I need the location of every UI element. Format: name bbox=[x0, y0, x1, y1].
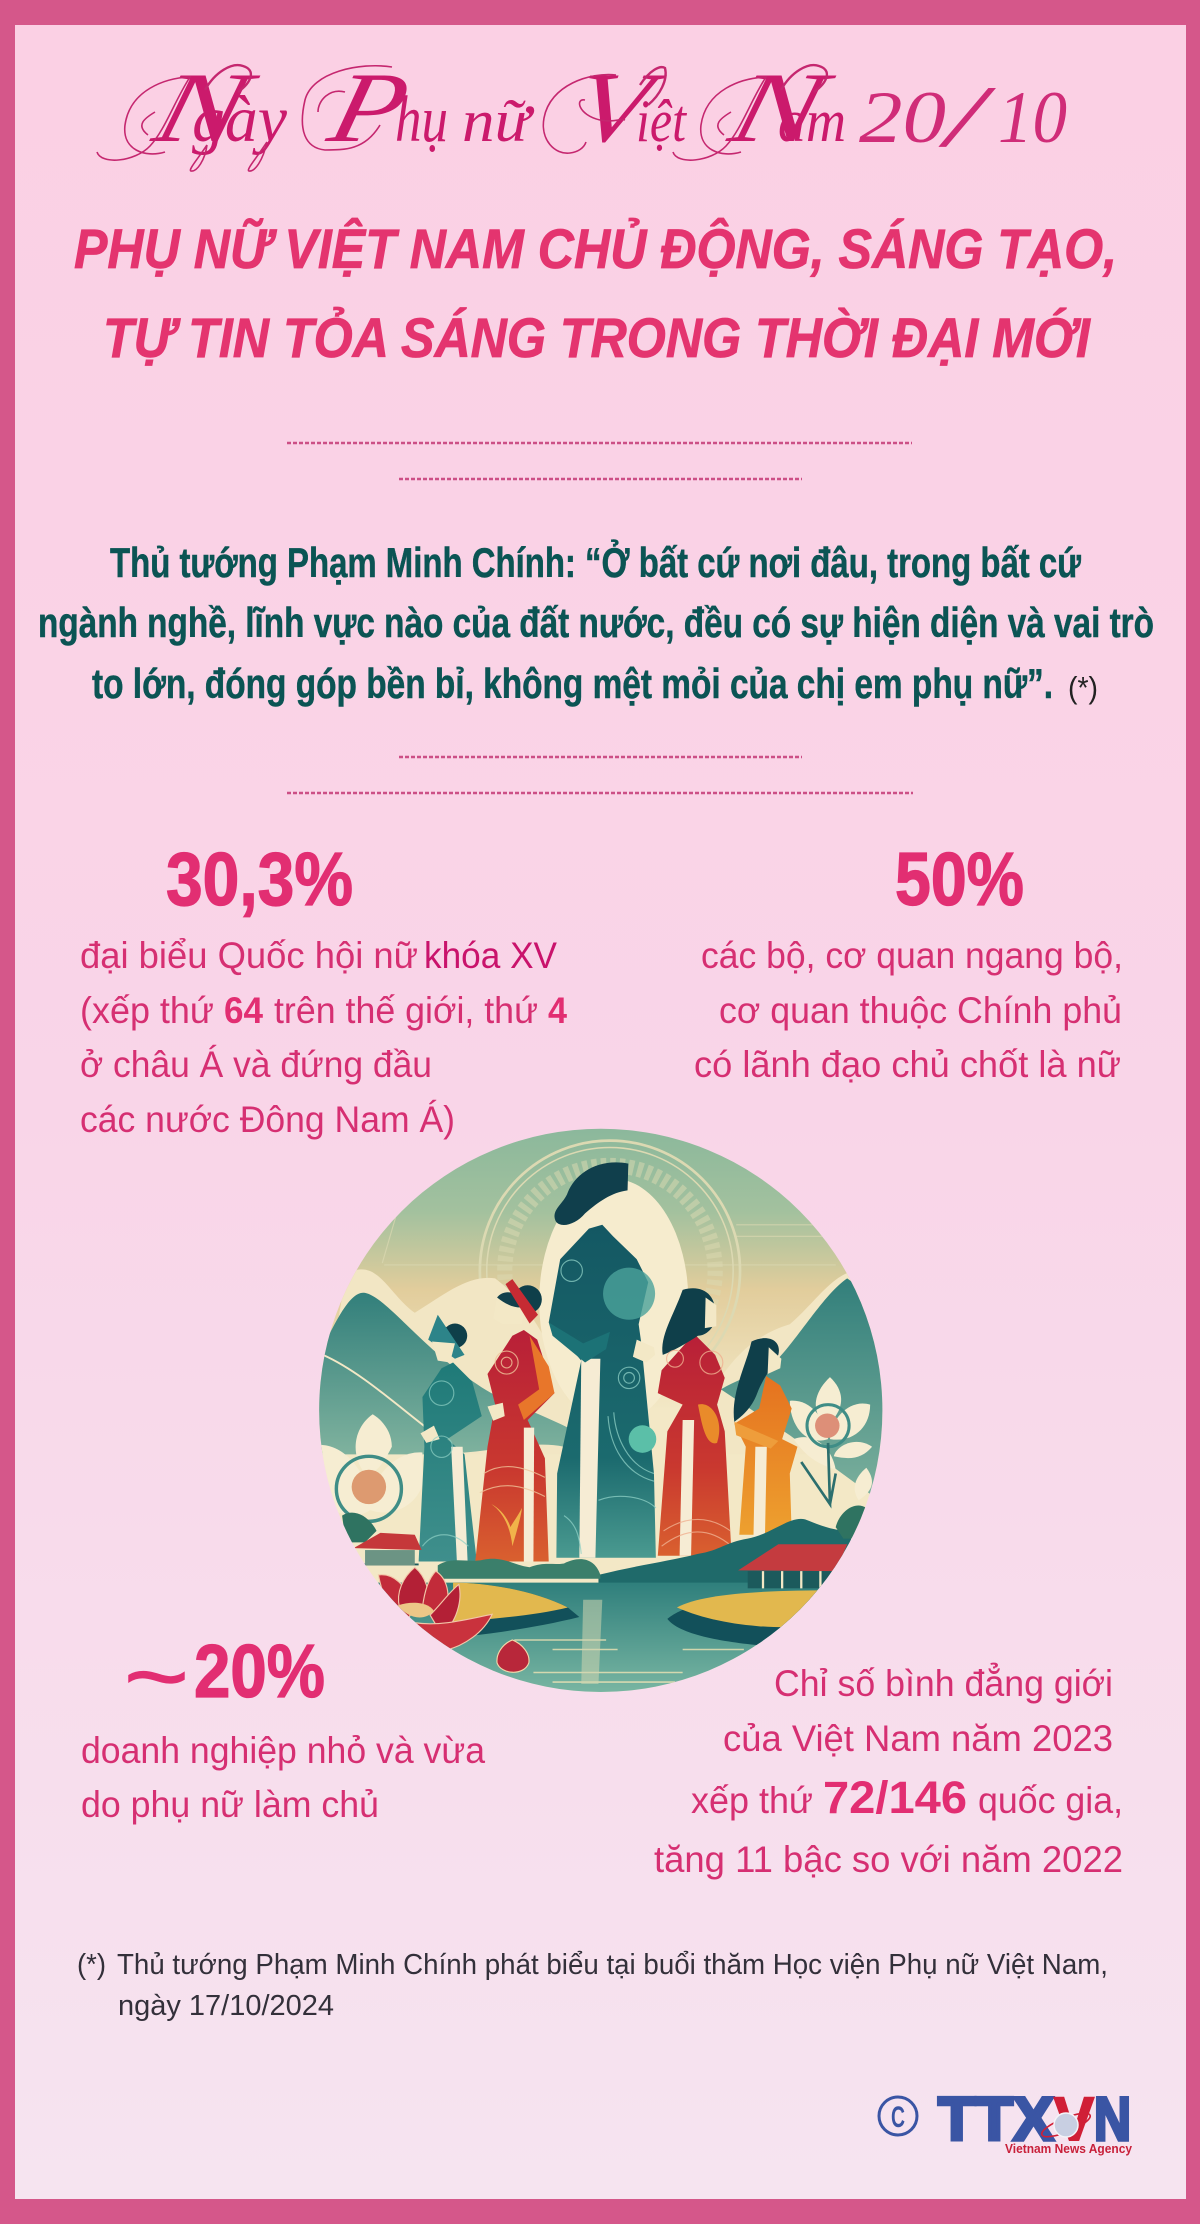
title script lettering: N bbox=[719, 52, 843, 163]
footnote: Thủ tướng Phạm Minh Chính phát biểu tại buổi thăm Học viện Phụ nữ Việt Nam, bbox=[117, 1949, 1108, 1981]
stat: 50% bbox=[694, 837, 1123, 1085]
number 30,3%: 30,3% bbox=[166, 837, 353, 921]
left pavilion bbox=[354, 1533, 422, 1565]
description: 64 bbox=[224, 990, 263, 1031]
title script lettering: gày bbox=[192, 83, 288, 156]
left mountains bbox=[311, 1293, 568, 1454]
title script lettering bbox=[143, 52, 1067, 166]
description: do phụ nữ làm chủ bbox=[81, 1784, 379, 1825]
lotus bud bbox=[497, 1640, 529, 1672]
title script lettering: / bbox=[937, 69, 997, 166]
logo: copyright and TTXVN bbox=[879, 2085, 1133, 2156]
footnote: ngày 17/10/2024 bbox=[118, 1990, 334, 2022]
illustration: five women in ao dai bbox=[319, 1128, 882, 1692]
stat: gender equality index bbox=[654, 1662, 1123, 1880]
stat: gender equality index: Chỉ số bình đẳng giới bbox=[774, 1662, 1113, 1704]
stat: gender equality index: xếp thứ bbox=[691, 1780, 813, 1821]
title script lettering: am bbox=[778, 88, 846, 154]
halo rings bbox=[382, 1141, 843, 1401]
description bbox=[694, 935, 1123, 1085]
description: các bộ, cơ quan ngang bộ, bbox=[701, 935, 1123, 976]
description: trên thế giới, thứ bbox=[274, 990, 538, 1031]
wordmark TTXVN bbox=[938, 2085, 1131, 2153]
wordmark TTXVN: TTX bbox=[938, 2085, 1054, 2153]
quote footnote marker: (*) bbox=[1068, 670, 1098, 705]
number ~20% bbox=[124, 1626, 325, 1728]
red lotus flower bbox=[378, 1567, 492, 1650]
title swashes bbox=[97, 65, 827, 171]
description: doanh nghiệp nhỏ và vừa bbox=[81, 1730, 485, 1771]
description bbox=[80, 935, 567, 1140]
water reflections bbox=[514, 1640, 744, 1682]
wordmark TTXVN: V bbox=[1054, 2085, 1094, 2153]
woman 4: red ao dai bbox=[658, 1288, 732, 1556]
woman 5: orange ao dai bbox=[734, 1338, 797, 1538]
right mountains bbox=[721, 1278, 889, 1508]
title script lettering: N bbox=[143, 52, 267, 163]
lake bbox=[378, 1582, 824, 1692]
stat: gender equality index: tăng 11 bậc so với năm 2022 bbox=[654, 1839, 1123, 1880]
title script lettering: V bbox=[568, 52, 672, 163]
lotus left bbox=[315, 1414, 422, 1521]
hill and tree line bbox=[598, 1519, 851, 1584]
footnote: (*) bbox=[77, 1949, 106, 1981]
stat: 30,3% bbox=[80, 837, 567, 1140]
number ~20%: ~ bbox=[124, 1626, 189, 1728]
description: (xếp thứ bbox=[80, 990, 214, 1031]
stat: about 20% bbox=[81, 1626, 485, 1825]
title script lettering: iệt bbox=[636, 88, 687, 154]
stat: gender equality index: 72/146 bbox=[823, 1772, 967, 1823]
rice banks bbox=[453, 1583, 843, 1646]
stat: gender equality index: quốc gia, bbox=[978, 1780, 1123, 1821]
title script lettering: 10 bbox=[998, 77, 1067, 159]
icon: copyright: C bbox=[891, 2101, 905, 2134]
title script lettering: nữ bbox=[462, 88, 535, 154]
title script lettering: P bbox=[318, 52, 419, 163]
description: đại biểu Quốc hội nữ bbox=[80, 935, 418, 976]
central woman: teal ao dai bbox=[549, 1162, 656, 1558]
description: ở châu Á và đứng đầu bbox=[80, 1044, 432, 1085]
wordmark TTXVN: N bbox=[1094, 2085, 1131, 2153]
woman 2: red and orange ao dai bbox=[475, 1279, 554, 1562]
description: các nước Đông Nam Á) bbox=[80, 1099, 455, 1140]
description: có lãnh đạo chủ chốt là nữ bbox=[694, 1044, 1121, 1085]
right pavilion bbox=[738, 1544, 847, 1588]
title: Ngày Phụ nữ Việt Nam 20/10 bbox=[97, 52, 1067, 171]
headline bbox=[74, 217, 1117, 369]
headline line 2: TỰ TIN TỎA SÁNG TRONG THỜI ĐẠI MỚI bbox=[103, 306, 1091, 369]
description: cơ quan thuộc Chính phủ bbox=[719, 990, 1122, 1031]
cream hills bbox=[338, 1269, 851, 1394]
lotus right bbox=[790, 1377, 872, 1504]
halo around main figure bbox=[539, 1179, 688, 1424]
number 50%: 50% bbox=[895, 837, 1024, 921]
icon: copyright bbox=[879, 2097, 917, 2135]
title script lettering: 20 bbox=[859, 77, 946, 159]
description: 4 bbox=[548, 990, 567, 1031]
number ~20%: 20% bbox=[194, 1629, 325, 1713]
sky bbox=[319, 1128, 882, 1692]
title script lettering: hụ bbox=[395, 83, 448, 156]
quote block bbox=[38, 538, 1154, 707]
agency name: Vietnam News Agency bbox=[1005, 2141, 1133, 2156]
footnote bbox=[77, 1949, 1108, 2022]
description: khóa XV bbox=[424, 935, 557, 976]
description bbox=[81, 1730, 485, 1825]
icon: globe with orbit bbox=[1039, 2109, 1093, 2141]
woman 1: teal ao dai bbox=[419, 1315, 482, 1562]
stat: gender equality index: của Việt Nam năm 2023 bbox=[723, 1718, 1113, 1759]
